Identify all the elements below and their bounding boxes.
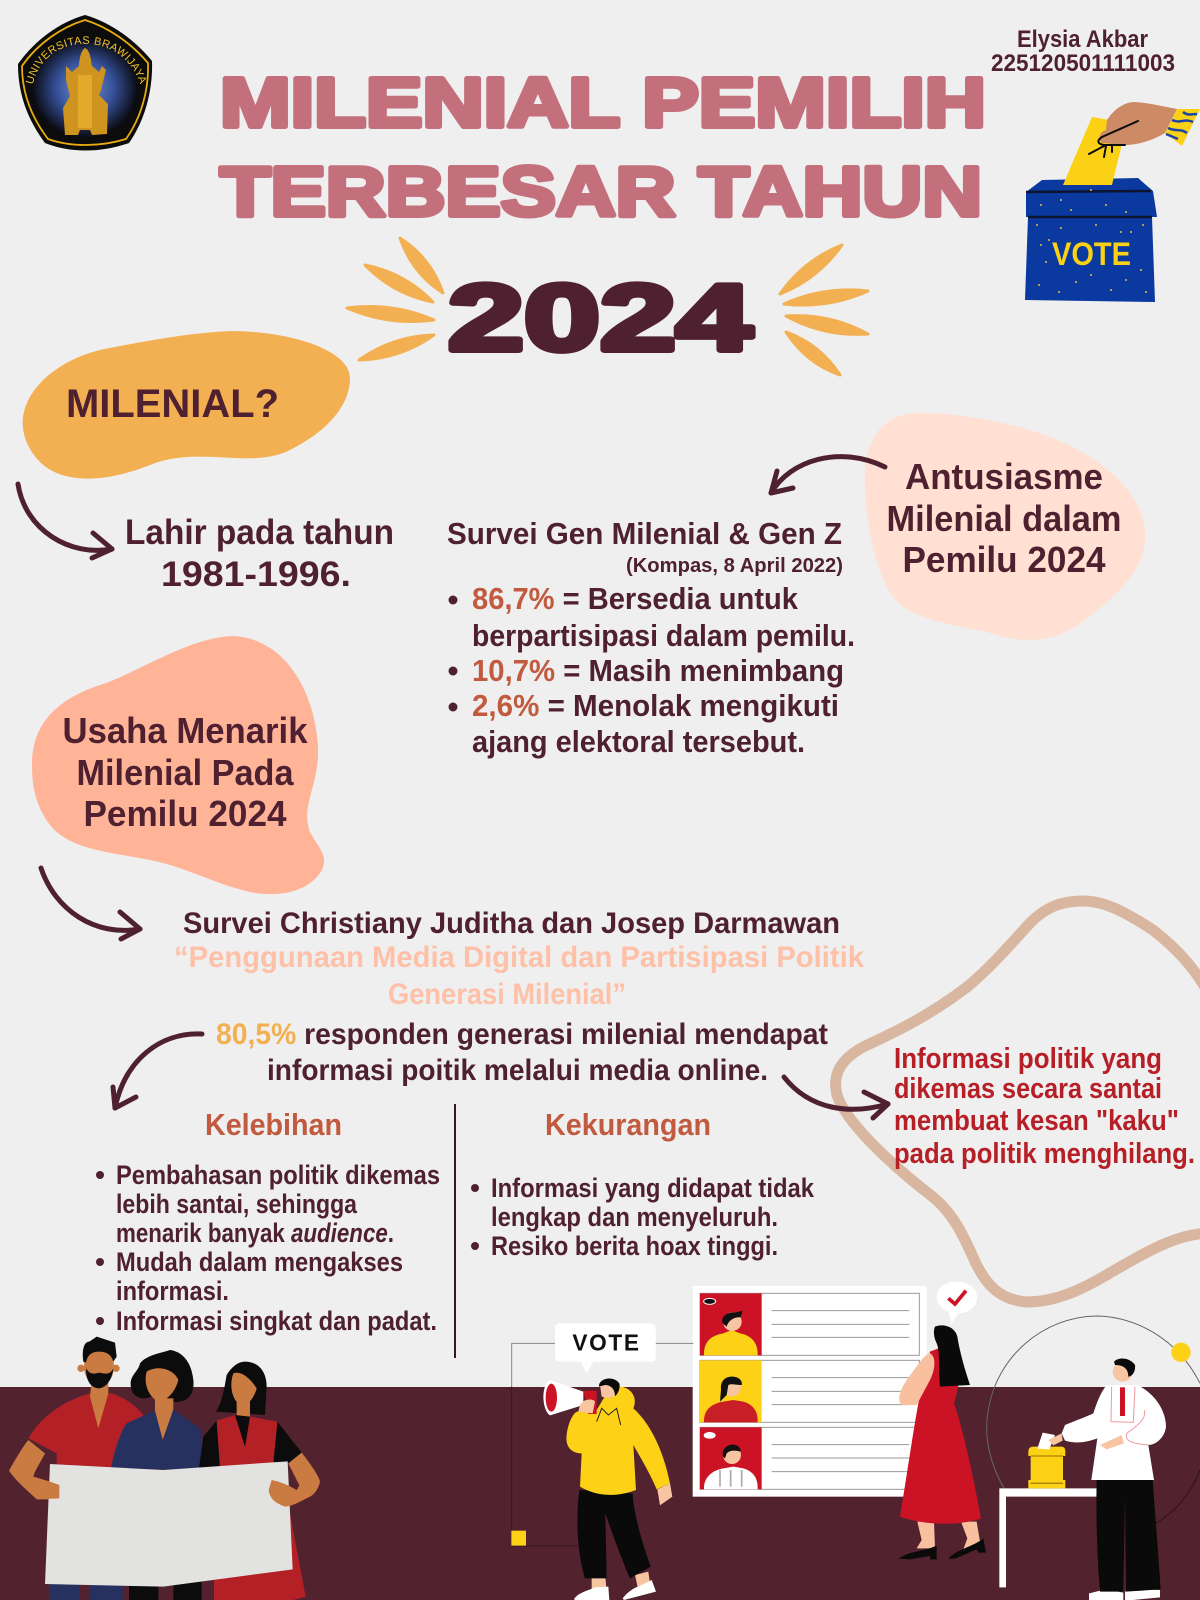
arrow: usaha to survey — [41, 868, 140, 939]
text block: survey Christiany Juditha: Survei Christiany Juditha dan Josep Darmawan — [183, 907, 840, 940]
panel: Kekurangan: Resiko berita hoax tinggi. — [491, 1231, 778, 1261]
text block: survey Christiany Juditha: Generasi Milenial” — [388, 978, 626, 1011]
candidate row 3 — [700, 1427, 919, 1489]
callout text: informal politics — [894, 1043, 1195, 1170]
text block: survey Gen Milenial and Gen Z: (Kompas, 8 April 2022) — [626, 555, 843, 577]
speech bubble: vote — [555, 1323, 656, 1373]
panel: Antusiasme blob: Milenial dalam — [886, 498, 1122, 539]
panel: Kelebihan: Mudah dalam mengakses — [116, 1247, 403, 1277]
panel: Kekurangan: lengkap dan menyeluruh. — [491, 1202, 778, 1232]
panel: Kekurangan: Informasi yang didapat tidak — [491, 1173, 815, 1203]
arrow: milenial to birth years — [18, 484, 112, 558]
arrow: statistic to callout — [784, 1077, 888, 1118]
text block: 80,5% statistic — [216, 1018, 828, 1087]
callout text: informal politics: Informasi politik yang — [894, 1043, 1162, 1075]
title: Milenial Pemilih Terbesar Tahun: TERBESAR TAHUN — [220, 152, 982, 230]
panel: Usaha Menarik blob — [32, 636, 324, 894]
divider between pros and cons — [454, 1104, 456, 1358]
panel: Usaha Menarik blob: Milenial Pada — [76, 752, 294, 793]
panel: Antusiasme blob: Antusiasme — [905, 456, 1103, 497]
text block: survey Christiany Juditha — [174, 907, 864, 1011]
panel: Usaha Menarik blob: Usaha Menarik — [62, 710, 308, 751]
illustration: woman in red dress — [899, 1282, 986, 1559]
logo: Universitas Brawijaya shield — [18, 15, 152, 150]
candidate row 1 — [700, 1293, 919, 1355]
title: Milenial Pemilih Terbesar Tahun — [220, 64, 986, 230]
panel: Milenial? blob: MILENIAL? — [66, 382, 279, 426]
text block: survey Gen Milenial and Gen Z: 10,7% = Masih menimbang — [472, 653, 844, 688]
text block: birth years — [125, 513, 394, 594]
panel: Kelebihan — [96, 1107, 440, 1336]
illustration: man casting vote at table — [987, 1316, 1200, 1600]
text block: 80,5% statistic: 80,5% responden generasi milenial mendapat — [216, 1018, 828, 1051]
panel: Antusiasme blob — [865, 413, 1145, 640]
text block: survey Gen Milenial and Gen Z: berpartisipasi dalam pemilu. — [472, 618, 855, 653]
panel: Kelebihan: menarik banyak audience. — [116, 1218, 394, 1248]
panel: Milenial? blob — [23, 331, 350, 479]
text block: birth years: Lahir pada tahun — [125, 513, 394, 552]
icon: hand dropping ballot into vote box: VOTE — [1052, 236, 1131, 272]
decoration: rays around the year — [347, 238, 868, 375]
woman in red vest — [199, 1362, 320, 1600]
callout outline: tan blob — [836, 901, 1200, 1302]
man in red shirt — [9, 1337, 143, 1600]
illustration: candidate board — [693, 1286, 927, 1497]
author name and student number — [991, 26, 1175, 77]
panel: Kelebihan: Kelebihan — [205, 1107, 342, 1142]
woman in blue shirt — [111, 1350, 202, 1600]
panel: Kelebihan: informasi. — [116, 1276, 229, 1306]
candidate row 2 — [700, 1360, 919, 1422]
logo: Universitas Brawijaya shield: UNIVERSITAS BRAWIJAYA — [26, 36, 146, 84]
author name and student number: 225120501111003 — [991, 50, 1175, 77]
title: Milenial Pemilih Terbesar Tahun: MILENIAL PEMILIH — [220, 64, 986, 142]
heading: year 2024: 2024 — [448, 265, 752, 370]
panel: Kelebihan: Informasi singkat dan padat. — [116, 1306, 437, 1336]
panel: Usaha Menarik blob: Pemilu 2024 — [84, 793, 286, 834]
icon: hand dropping ballot into vote box — [1025, 102, 1200, 302]
hands gripping sheet — [33, 1477, 320, 1507]
panel: Kelebihan: lebih santai, sehingga — [116, 1189, 358, 1219]
text block: survey Christiany Juditha: “Penggunaan Media Digital dan Partisipasi Politik — [174, 941, 864, 974]
panel: Kekurangan: Kekurangan — [545, 1107, 711, 1142]
text block: survey Gen Milenial and Gen Z: 2,6% = Menolak mengikuti — [472, 688, 839, 723]
speech bubble: check mark — [937, 1282, 977, 1324]
illustration: three people holding a blank sheet — [9, 1337, 320, 1600]
dark floor band — [0, 1387, 1200, 1600]
yellow ballot box — [1028, 1433, 1065, 1488]
text block: survey Gen Milenial and Gen Z: 86,7% = Bersedia untuk — [472, 581, 799, 616]
text block: birth years: 1981-1996. — [161, 555, 351, 594]
panel: Kelebihan: Pembahasan politik dikemas — [116, 1160, 440, 1190]
text block: 80,5% statistic: informasi poitik melalui media online. — [267, 1054, 768, 1087]
text block: survey Gen Milenial and Gen Z: Survei Gen Milenial & Gen Z — [447, 516, 842, 551]
text block: survey Gen Milenial and Gen Z: ajang elektoral tersebut. — [472, 724, 805, 759]
illustration: man in yellow hoodie with megaphone — [511, 1323, 693, 1600]
callout text: informal politics: dikemas secara santai — [894, 1073, 1162, 1105]
arrow: statistic to advantages — [113, 1034, 202, 1108]
panel: Antusiasme blob: Pemilu 2024 — [902, 539, 1106, 580]
text block: survey Gen Milenial and Gen Z — [447, 516, 855, 759]
arrow: antusiasme to survey — [771, 457, 885, 493]
blank sheet — [45, 1461, 293, 1587]
author name and student number: Elysia Akbar — [1017, 26, 1148, 53]
panel: Kekurangan — [471, 1107, 815, 1261]
speech bubble: vote: VOTE — [572, 1329, 639, 1355]
